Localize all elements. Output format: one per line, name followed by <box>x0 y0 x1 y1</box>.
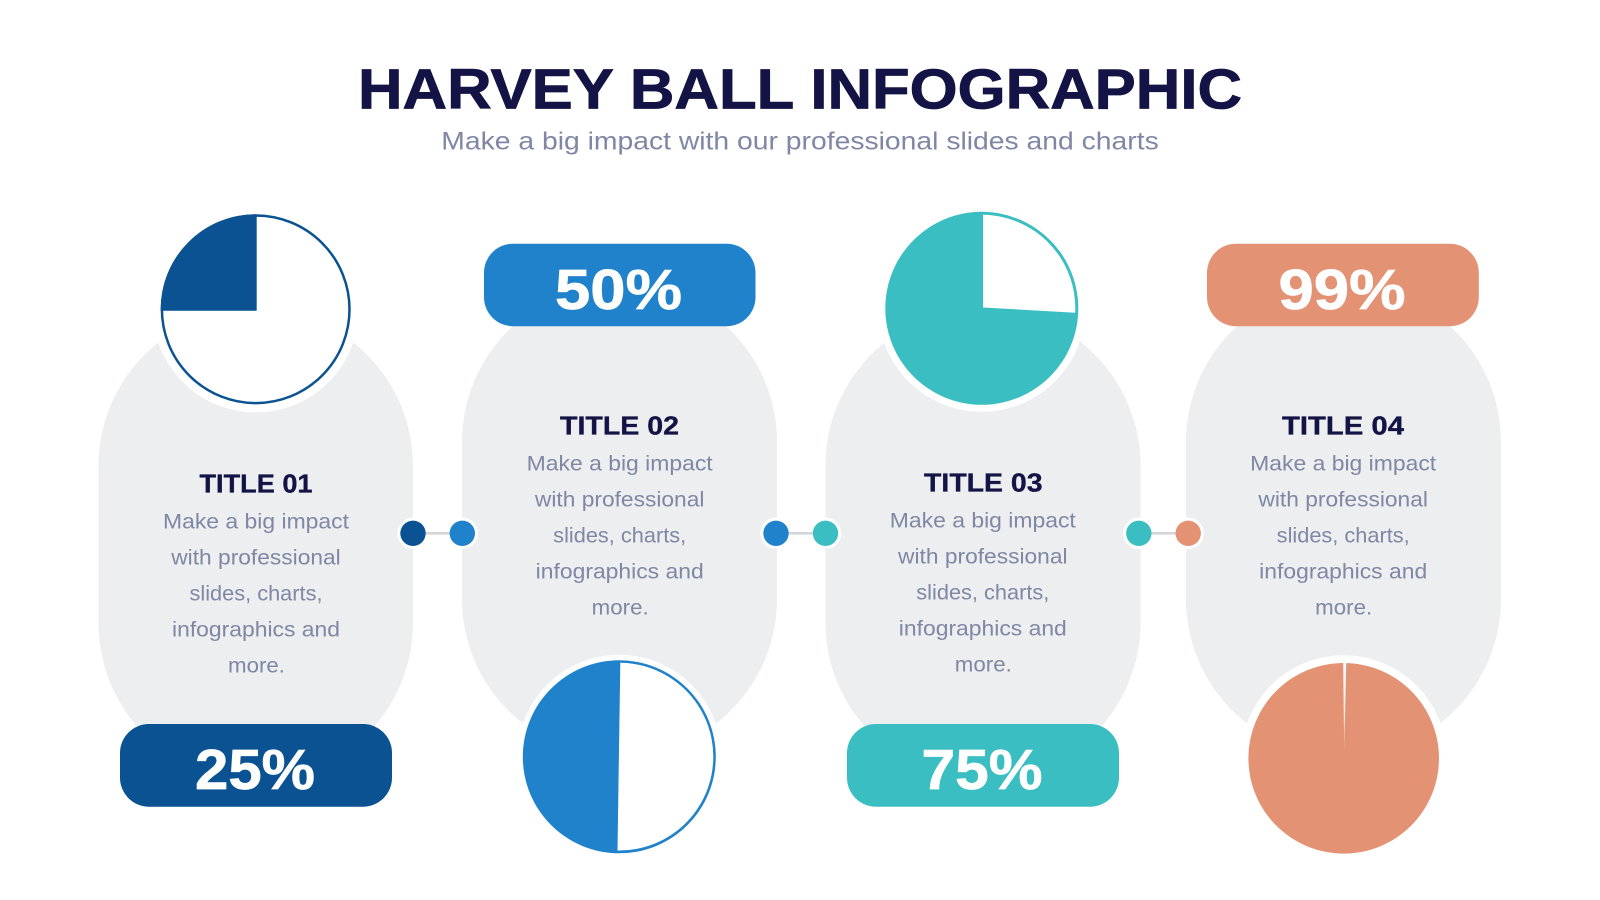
subtitle: Make a big impact with our professional slides and charts <box>441 127 1159 155</box>
percent badge 25%: 25% <box>195 738 315 802</box>
text block: column 2 description: slides, charts, <box>553 524 686 547</box>
text block: column 3 description: Make a big impact <box>890 510 1076 532</box>
connector: column 3 to 4 <box>1123 518 1204 549</box>
percent badge 75% <box>847 724 1119 807</box>
heading: title 01: TITLE 01 <box>200 468 312 498</box>
text block: column 1 description: infographics and <box>172 618 340 641</box>
text block: column 3 description: more. <box>955 654 1012 676</box>
text block: column 2 description: infographics and <box>536 560 704 583</box>
text block: column 4 description: slides, charts, <box>1277 524 1410 547</box>
text block: column 4 description: infographics and <box>1259 560 1427 583</box>
text block: column 1 description: with professional <box>170 546 341 569</box>
text block: column 4 description: more. <box>1315 596 1372 619</box>
percent badge 50% <box>484 244 756 326</box>
text block: column 3 description: slides, charts, <box>916 582 1049 604</box>
text block: column 1 description <box>163 510 349 677</box>
connector: column 1 to 2 <box>397 518 478 549</box>
percent badge 99% <box>1207 244 1479 326</box>
percent badge 50%: 50% <box>555 258 682 322</box>
harvey ball 50% <box>517 655 721 859</box>
percent badge 99%: 99% <box>1278 258 1406 322</box>
text block: column 3 description <box>890 510 1076 676</box>
text block: column 1 description: slides, charts, <box>190 582 322 605</box>
text block: column 1 description: more. <box>228 654 285 677</box>
panel: column 3 <box>826 205 1140 807</box>
card background 3 <box>826 308 1140 780</box>
card background 2 <box>462 284 777 756</box>
text block: column 3 description: infographics and <box>899 618 1067 640</box>
text block: column 2 description: with professional <box>534 488 704 511</box>
text block: column 2 description: Make a big impact <box>527 452 713 475</box>
text block: column 4 description: Make a big impact <box>1250 452 1436 475</box>
percent badge 75%: 75% <box>922 738 1042 802</box>
panel: column 2 <box>462 244 777 859</box>
panel: column 4 <box>1186 244 1501 861</box>
harvey ball 99% <box>1241 655 1447 861</box>
card background 4 <box>1186 284 1501 756</box>
text block: column 2 description: more. <box>592 596 649 619</box>
heading: title 04: TITLE 04 <box>1282 410 1405 440</box>
percent badge 25% <box>120 724 392 807</box>
harvey ball 25% <box>153 206 359 412</box>
text block: column 2 description <box>527 452 713 619</box>
panel: column 1 <box>98 206 413 807</box>
heading: title 03: TITLE 03 <box>924 468 1043 498</box>
heading: title 02: TITLE 02 <box>560 410 679 440</box>
text block: column 4 description <box>1250 452 1436 619</box>
text block: column 1 description: Make a big impact <box>163 510 349 533</box>
text block: column 3 description: with professional <box>897 546 1068 568</box>
harvey ball 75% <box>878 205 1085 412</box>
title: HARVEY BALL INFOGRAPHIC <box>358 58 1242 122</box>
text block: column 4 description: with professional <box>1257 488 1428 511</box>
connector: column 2 to 3 <box>760 518 841 549</box>
card background 1 <box>98 308 413 780</box>
